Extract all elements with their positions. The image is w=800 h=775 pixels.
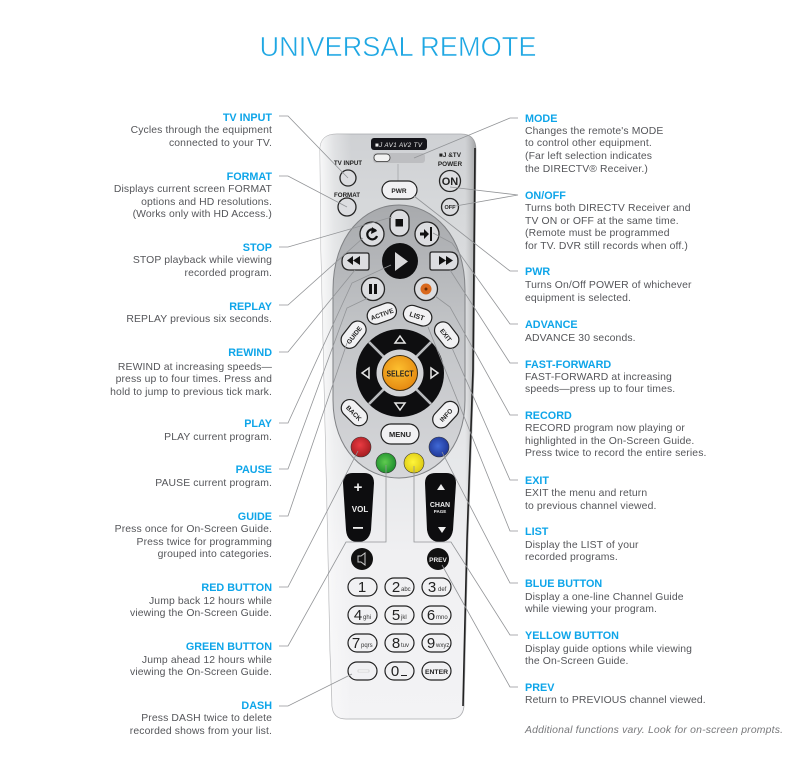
callout: MODE: the DIRECTV® Receiver.): [525, 164, 648, 175]
callout: STOP: STOP playback while viewing: [133, 255, 272, 266]
callout: PWR: Turns On/Off POWER of whichever: [525, 280, 692, 291]
callout: TV INPUT: Cycles through the equipment: [131, 125, 272, 136]
callout: FAST-FORWARD: [450, 270, 675, 395]
remote body: [320, 134, 476, 719]
keypad: wxyz: [435, 643, 449, 649]
callout: MODE: Changes the remote's MODE: [525, 126, 663, 137]
callout: GREEN BUTTON: [130, 465, 386, 678]
callout: ON/OFF: [450, 187, 691, 252]
button: active: [365, 300, 399, 327]
button: power on: POWER: [438, 161, 462, 168]
callout: GREEN BUTTON: GREEN BUTTON: [186, 641, 272, 653]
keypad: 5: [392, 607, 400, 624]
callout: ADVANCE: ADVANCE: [525, 319, 578, 331]
volume rocker: [343, 473, 374, 542]
callout: FORMAT: [114, 171, 347, 220]
volume rocker: VOL: [352, 505, 368, 514]
callout: YELLOW BUTTON: YELLOW BUTTON: [525, 630, 619, 642]
callout: ON/OFF: for TV. DVR still records when off.): [525, 241, 688, 252]
keypad: 3: [428, 579, 436, 596]
button: mute: [351, 548, 373, 570]
button: stop: [390, 210, 409, 236]
callout: PREV: [442, 565, 706, 706]
callout: RED BUTTON: viewing the On-Screen Guide.: [130, 608, 272, 619]
button: power on: ■J &TV: [439, 152, 462, 159]
callout: MODE: to control other equipment.: [525, 138, 652, 149]
callout: FORMAT: options and HD resolutions.: [141, 197, 272, 208]
keypad: mno: [436, 615, 448, 621]
button: advance: [415, 222, 439, 246]
callout: DASH: [130, 674, 352, 737]
button: exit: EXIT: [438, 328, 452, 343]
button: back: [338, 396, 371, 429]
callout: REWIND: press up to four times. Press and: [116, 374, 272, 385]
callout: TV INPUT: connected to your TV.: [169, 138, 272, 149]
callout: RECORD: highlighted in the On-Screen Guide.: [525, 436, 694, 447]
button: info: INFO: [439, 408, 455, 424]
callout: REWIND: [110, 270, 355, 398]
callout: DASH: Press DASH twice to delete: [141, 713, 272, 724]
channel rocker: CHAN: [430, 502, 450, 509]
callout: DASH: recorded shows from your list.: [130, 726, 272, 737]
button: power on: ON: [442, 176, 458, 188]
button: record: [414, 278, 438, 300]
callout: ON/OFF: TV ON or OFF at the same time.: [525, 216, 679, 227]
callout: PWR: equipment is selected.: [525, 293, 631, 304]
callout: REWIND: hold to jump to previous tick mark.: [110, 387, 272, 398]
callout: ON/OFF: ON/OFF: [525, 190, 566, 202]
callout: REPLAY: REPLAY: [229, 301, 273, 313]
callout: EXIT: EXIT: [525, 475, 549, 487]
keypad: 8: [392, 635, 400, 652]
callout: BLUE BUTTON: [442, 452, 684, 615]
button: exit: [431, 318, 462, 352]
button: rewind: [342, 253, 369, 270]
button: prev: [427, 548, 449, 570]
button: format: FORMAT: [334, 192, 360, 199]
callout: FORMAT: Displays current screen FORMAT: [114, 184, 273, 195]
keypad: 1: [358, 579, 366, 596]
callout: FAST-FORWARD: FAST-FORWARD at increasing: [525, 372, 672, 383]
keypad: ENTER: [425, 669, 448, 676]
button: TV input: TV INPUT: [334, 160, 362, 167]
callout: PAUSE: PAUSE current program.: [155, 478, 272, 489]
callout: LIST: [428, 327, 639, 563]
callout: LIST: Display the LIST of your: [525, 540, 639, 551]
button: guide: GUIDE: [346, 325, 364, 346]
callout: RED BUTTON: [130, 451, 358, 619]
callout: TV INPUT: [131, 112, 348, 178]
button: blue: [429, 437, 449, 457]
button: power off: OFF: [444, 205, 456, 211]
callout: STOP: recorded program.: [184, 268, 272, 279]
button: replay: [360, 222, 384, 246]
keypad: ghi: [363, 615, 371, 621]
callout: GREEN BUTTON: viewing the On-Screen Guide.: [130, 667, 272, 678]
callout: MODE: MODE: [525, 113, 557, 125]
remote control: [320, 134, 476, 719]
callout: RECORD: [435, 296, 707, 459]
button: active: ACTIVE: [370, 307, 395, 322]
callout: STOP: STOP: [243, 242, 272, 254]
keypad: pqrs: [361, 643, 373, 649]
callout: TV INPUT: TV INPUT: [223, 112, 272, 124]
button: PWR: [382, 181, 417, 199]
button: menu: [381, 424, 419, 444]
callout: PLAY: PLAY: [244, 418, 273, 430]
button: prev: PREV: [429, 557, 448, 564]
callout: RECORD: RECORD: [525, 410, 572, 422]
callout: ADVANCE: ADVANCE 30 seconds.: [525, 333, 636, 344]
button: PWR: PWR: [391, 188, 407, 195]
callout: PWR: PWR: [525, 266, 550, 278]
callout: ON/OFF: Turns both DIRECTV Receiver and: [525, 203, 691, 214]
keypad: 0: [391, 663, 399, 680]
button: list: [401, 303, 434, 328]
callout: EXIT: to previous channel viewed.: [525, 501, 656, 512]
button: guide: [338, 318, 370, 352]
callout: LIST: LIST: [525, 526, 549, 538]
button: TV input: [334, 160, 362, 186]
callout: FAST-FORWARD: speeds—press up to four times.: [525, 384, 675, 395]
button: play: [382, 243, 418, 279]
keypad: 9: [427, 635, 435, 652]
button: power off: [442, 198, 458, 216]
callout: BLUE BUTTON: while viewing your program.: [524, 604, 657, 615]
callout: PAUSE: PAUSE: [236, 464, 272, 476]
keypad: abc: [401, 587, 411, 593]
callout: FORMAT: FORMAT: [227, 171, 272, 183]
keypad: def: [438, 587, 447, 593]
keypad: 7: [352, 635, 360, 652]
button: list: LIST: [408, 311, 426, 323]
button: power on: [438, 152, 462, 192]
callout: FORMAT: (Works only with HD Access.): [133, 209, 272, 220]
callout: PLAY: [164, 265, 391, 443]
callout: LIST: recorded programs.: [525, 552, 618, 563]
callout: RED BUTTON: RED BUTTON: [201, 582, 272, 594]
channel rocker: [425, 473, 456, 542]
callout: REWIND: REWIND: [228, 347, 272, 359]
callout: DASH: DASH: [241, 700, 272, 712]
callout: YELLOW BUTTON: Display guide options while viewing: [525, 644, 692, 655]
callout: GREEN BUTTON: Jump ahead 12 hours while: [142, 655, 272, 666]
keypad: [348, 578, 451, 680]
callout: YELLOW BUTTON: the On-Screen Guide.: [525, 656, 628, 667]
button: menu: MENU: [389, 430, 411, 439]
callout: REPLAY: REPLAY previous six seconds.: [126, 314, 272, 325]
callout: BLUE BUTTON: BLUE BUTTON: [525, 578, 602, 590]
callout: RECORD: RECORD program now playing or: [525, 423, 685, 434]
button: back: BACK: [344, 405, 363, 423]
callout: REWIND: REWIND at increasing speeds—: [118, 362, 272, 373]
callout: PAUSE: [155, 298, 368, 489]
callout: BLUE BUTTON: Display a one-line Channel Guide: [525, 592, 684, 603]
callout: GUIDE: Press once for On-Screen Guide.: [115, 524, 272, 535]
keypad: 4: [354, 607, 362, 624]
mode switch: ■J AV1 AV2 TV: [375, 142, 423, 149]
callout: GUIDE: GUIDE: [238, 511, 272, 523]
button: green: [376, 453, 396, 473]
callout: STOP: [133, 217, 392, 279]
callout: GUIDE: [115, 343, 347, 560]
keypad: 6: [427, 607, 435, 624]
button: format: [334, 192, 360, 216]
keypad: tuv: [401, 643, 409, 649]
callout: FAST-FORWARD: FAST-FORWARD: [525, 359, 611, 371]
button: yellow: [404, 453, 424, 473]
keypad: 2: [392, 579, 400, 596]
directional pad: [356, 329, 444, 417]
callout: PREV: Return to PREVIOUS channel viewed.: [525, 695, 706, 706]
keypad: jkl: [400, 615, 407, 621]
callout: ADVANCE: [433, 233, 636, 344]
volume rocker: +: [354, 479, 363, 496]
title: UNIVERSAL REMOTE: [260, 31, 536, 62]
callout: EXIT: EXIT the menu and return: [525, 488, 647, 499]
callout: REPLAY: [126, 238, 363, 325]
callout: GUIDE: Press twice for programming: [137, 537, 272, 548]
callout: PREV: PREV: [525, 682, 555, 694]
button: red: [351, 437, 371, 457]
callout: MODE: (Far left selection indicates: [525, 151, 652, 162]
button: pause: [362, 278, 384, 300]
callout: ON/OFF: (Remote must be programmed: [525, 228, 670, 239]
footnote: Additional functions vary. Look for on-screen prompts.: [524, 725, 783, 736]
callout: GUIDE: grouped into categories.: [158, 549, 272, 560]
callout: PLAY: PLAY current program.: [164, 432, 272, 443]
mode switch: [371, 138, 427, 163]
callout: PWR: [414, 196, 692, 304]
callout: RECORD: Press twice to record the entire series.: [525, 448, 707, 459]
callout: RED BUTTON: Jump back 12 hours while: [149, 596, 272, 607]
button: fast-forward: [430, 252, 458, 270]
callout: EXIT: [452, 348, 656, 512]
callout: MODE: [414, 113, 663, 175]
callout: YELLOW BUTTON: [414, 466, 692, 667]
navigation oval panel: [333, 205, 465, 478]
button: select: SELECT: [386, 368, 414, 378]
button: info: [429, 398, 462, 431]
channel rocker: PAGE: [434, 509, 446, 514]
